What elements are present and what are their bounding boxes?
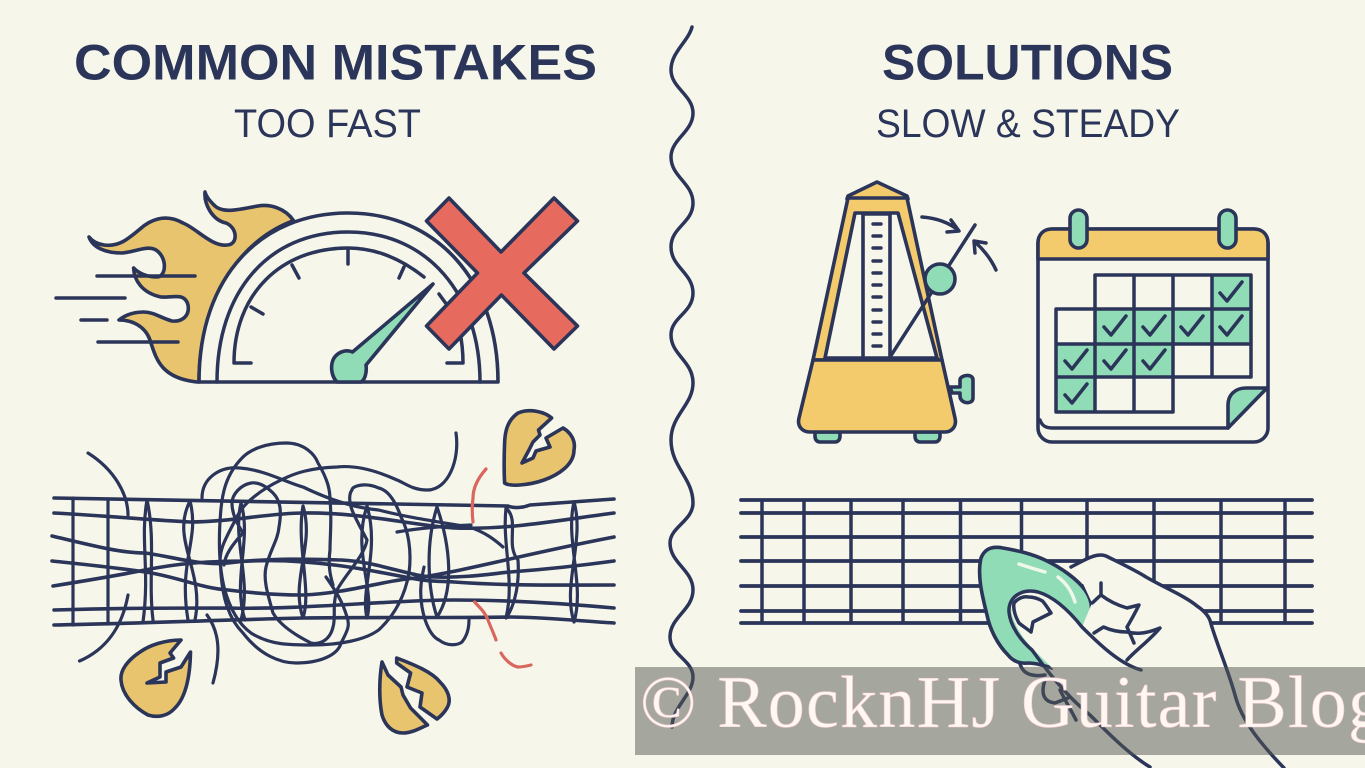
page curl [1040, 420, 1228, 428]
subheading: slow and steady: SLOW & STEADY [876, 102, 1180, 146]
metronome feet [815, 432, 940, 442]
metronome roof [847, 182, 908, 199]
bent frets [73, 498, 577, 625]
calendar header [1038, 229, 1268, 259]
pendulum [890, 225, 975, 357]
pick highlights [1019, 564, 1075, 602]
metronome body [813, 198, 942, 360]
completed days [1056, 275, 1251, 412]
illustration: clean fretboard [741, 500, 1312, 623]
heading: common mistakes: COMMON MISTAKES [74, 34, 597, 90]
thumb [1009, 591, 1150, 767]
watermark background [635, 667, 1365, 755]
calendar grid [1056, 275, 1251, 412]
metronome window [825, 213, 937, 358]
finger creases [1092, 583, 1160, 660]
illustration: tangled fretboard [52, 411, 614, 733]
broken pick: top right [504, 411, 574, 485]
icon: practice calendar [1038, 210, 1268, 442]
gauge ticks [251, 249, 447, 314]
thumbnail [1014, 597, 1051, 632]
subheading: too fast: TOO FAST [234, 102, 421, 146]
watermark text: © RocknHJ Guitar Blog [640, 662, 1365, 744]
hand fill [1011, 555, 1284, 768]
motion arrows [922, 217, 996, 270]
broken red strings [472, 469, 531, 667]
calendar page [1038, 229, 1268, 442]
metronome scale [863, 214, 890, 358]
wavy divider [670, 27, 693, 727]
icon: speedometer with flames [56, 192, 578, 382]
watermark band [635, 662, 1365, 755]
icon: metronome [799, 182, 996, 442]
metronome knob [950, 375, 973, 403]
icon: hand holding green pick [980, 547, 1284, 768]
broken pick: bottom middle [397, 658, 449, 719]
broken pick: bottom left [121, 640, 190, 716]
hand outline [1071, 555, 1284, 768]
straight strings [741, 500, 1312, 623]
red cross [426, 198, 578, 349]
tangled strings [54, 498, 614, 508]
straight frets [762, 500, 1285, 623]
icon: flames [89, 192, 294, 382]
heading: solutions: SOLUTIONS [882, 34, 1173, 90]
curled fingers [1020, 664, 1076, 720]
calendar rings [1070, 210, 1087, 248]
loose string loops [80, 453, 218, 683]
gauge dial [199, 213, 498, 382]
green pick [980, 547, 1092, 668]
checkmarks [1065, 282, 1242, 403]
gauge needle [332, 284, 433, 382]
speed lines [56, 276, 195, 342]
metronome base [799, 360, 955, 432]
